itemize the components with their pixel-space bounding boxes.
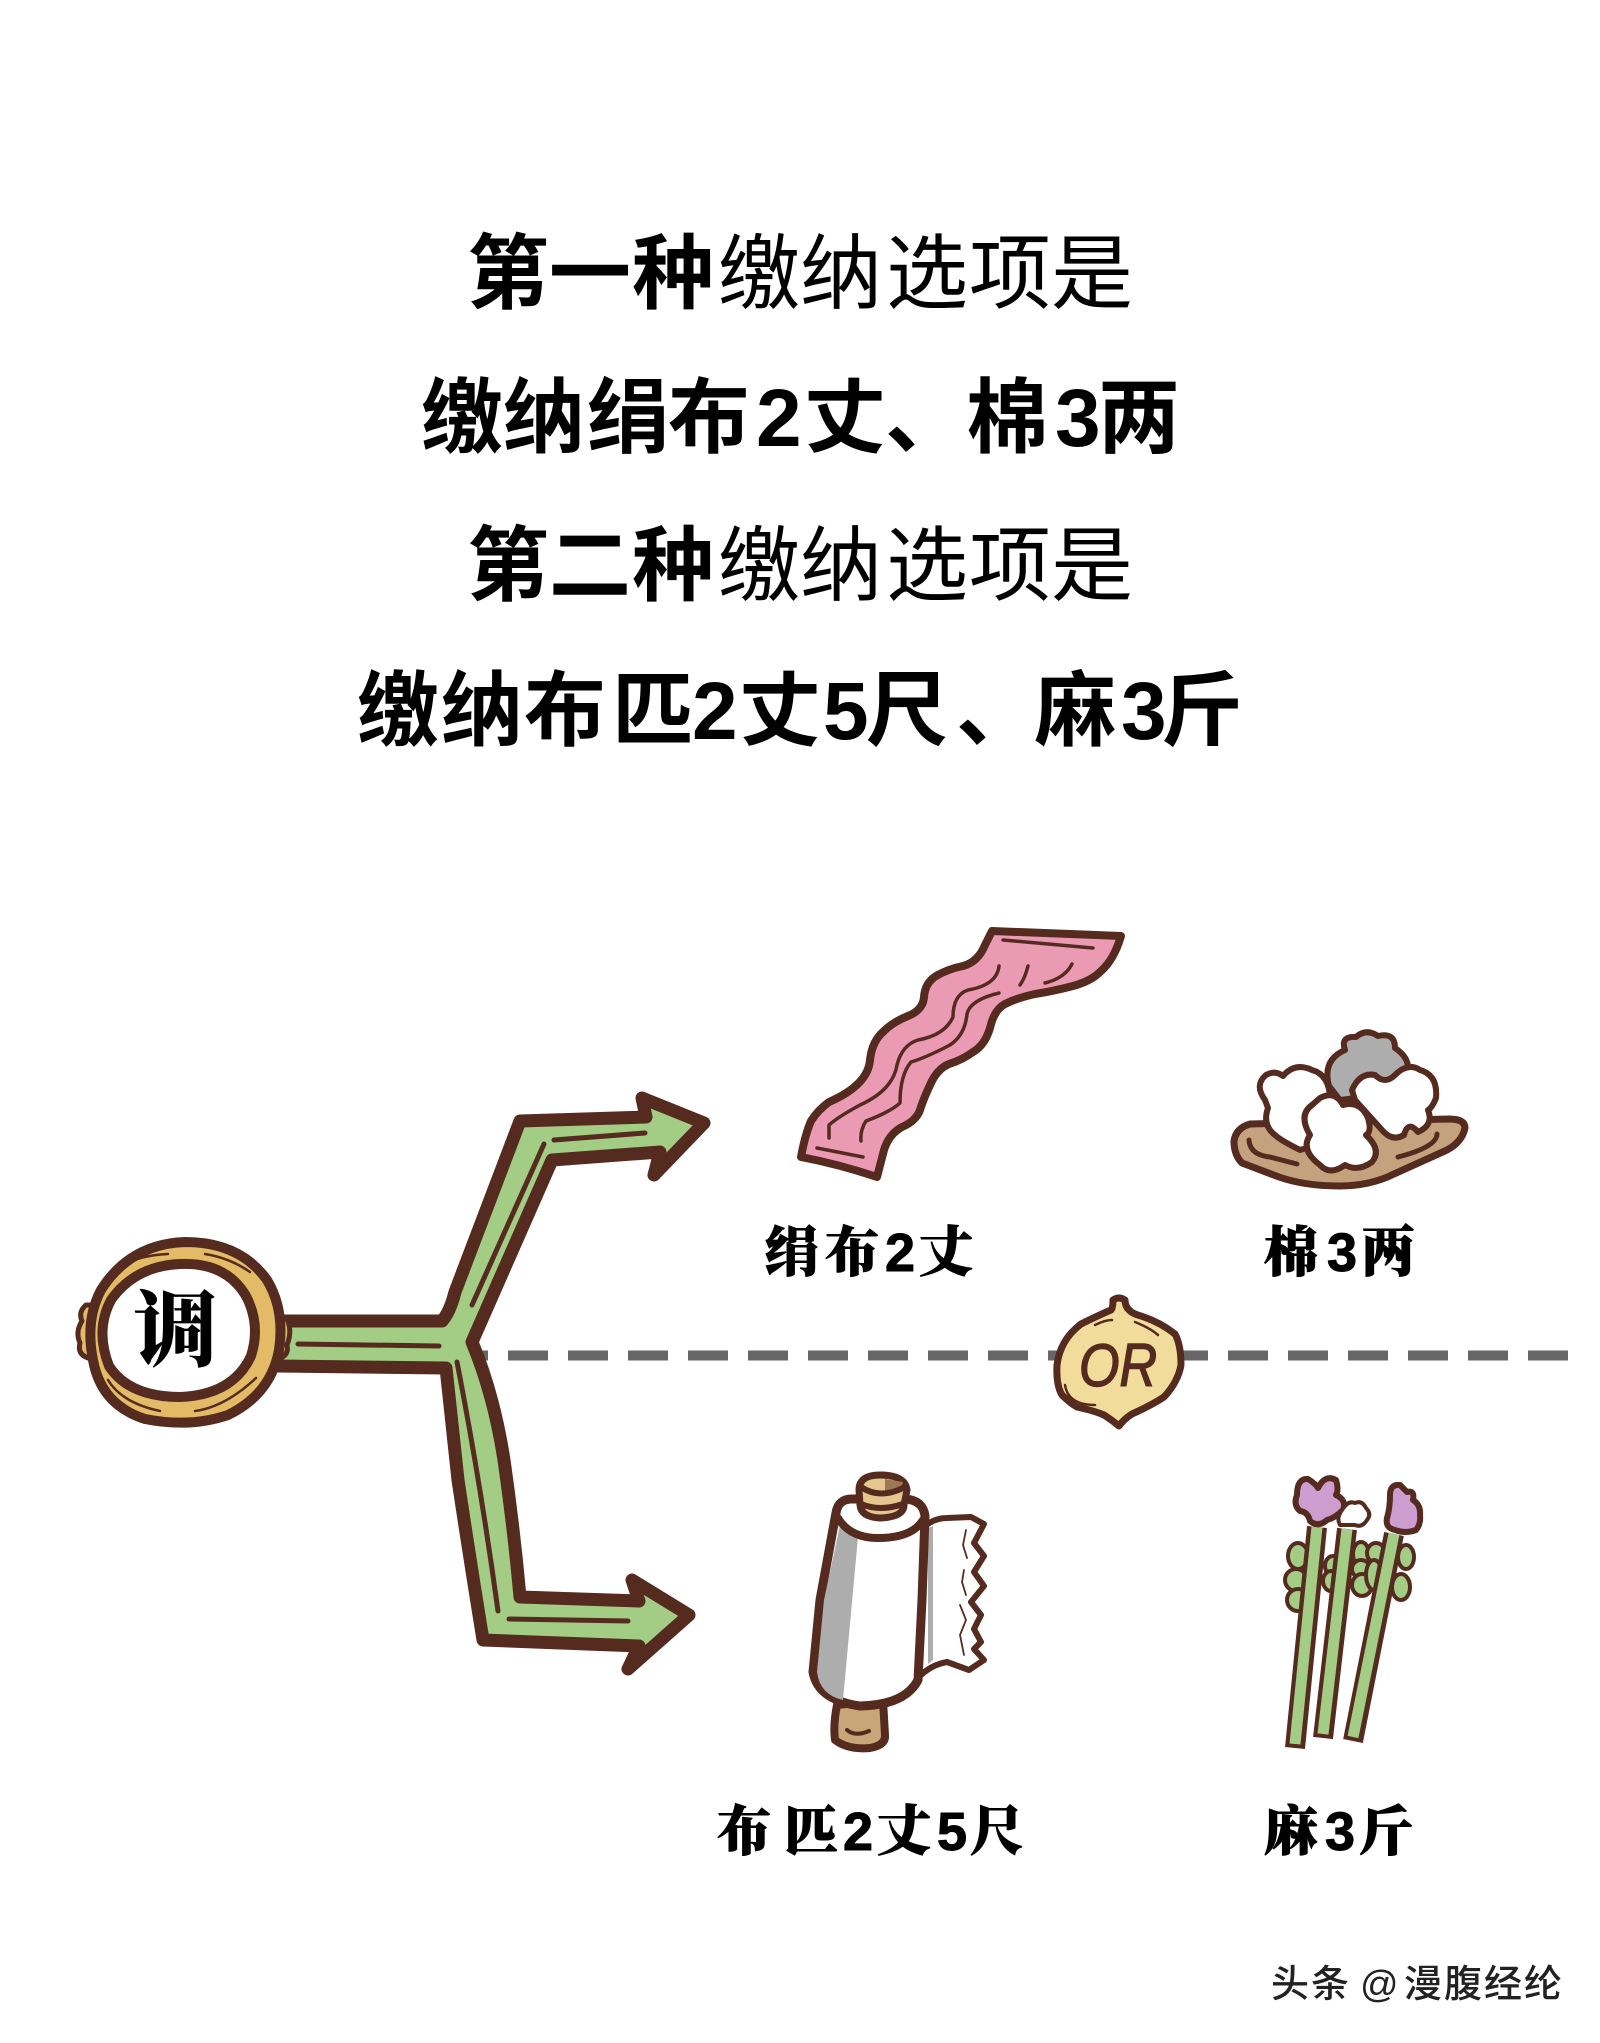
title text block	[357, 229, 1243, 757]
watermark: 头条@漫腹经纶	[1271, 1964, 1562, 2006]
line 4: 缴纳布匹2丈5尺、麻3斤	[357, 666, 1243, 757]
label: cotton: 棉3两	[1264, 1222, 1415, 1283]
silk icon	[801, 931, 1121, 1177]
leaves	[1285, 1542, 1414, 1611]
hemp icon	[1285, 1478, 1420, 1748]
roll body	[813, 1499, 925, 1706]
line 3: 第二种	[467, 521, 714, 612]
line 1: 第一种	[467, 229, 714, 320]
OR badge	[1057, 1298, 1181, 1426]
label: hemp: 麻3斤	[1264, 1802, 1413, 1862]
ring	[90, 1242, 280, 1423]
gray boll	[1327, 1032, 1408, 1100]
flowers	[1296, 1478, 1344, 1524]
label: cloth: 布匹2丈5尺	[717, 1802, 1024, 1862]
flap	[918, 1517, 984, 1678]
character: 调	[133, 1284, 217, 1378]
label: silk: 绢布2丈	[765, 1223, 973, 1283]
line 3: 缴纳选项是	[718, 521, 1133, 612]
rod bottom	[834, 1700, 885, 1748]
rod top	[859, 1475, 907, 1518]
cloth roll icon	[813, 1475, 984, 1748]
OR text: OR	[1079, 1332, 1157, 1399]
tray	[1234, 1119, 1465, 1186]
ring centre	[102, 1264, 255, 1397]
line 2: 缴纳绢布2丈、棉3两	[421, 373, 1180, 464]
line 1: 缴纳选项是	[718, 229, 1133, 320]
white boll left	[1260, 1067, 1335, 1150]
branching arrows	[277, 1098, 704, 1669]
cotton icon	[1234, 1032, 1465, 1186]
ring handles	[78, 1305, 290, 1359]
stems	[1295, 1527, 1394, 1748]
tax node: ring with 调	[78, 1242, 290, 1423]
white boll centre	[1304, 1095, 1376, 1170]
dashed divider line	[470, 1350, 1572, 1360]
white boll right	[1352, 1067, 1436, 1138]
